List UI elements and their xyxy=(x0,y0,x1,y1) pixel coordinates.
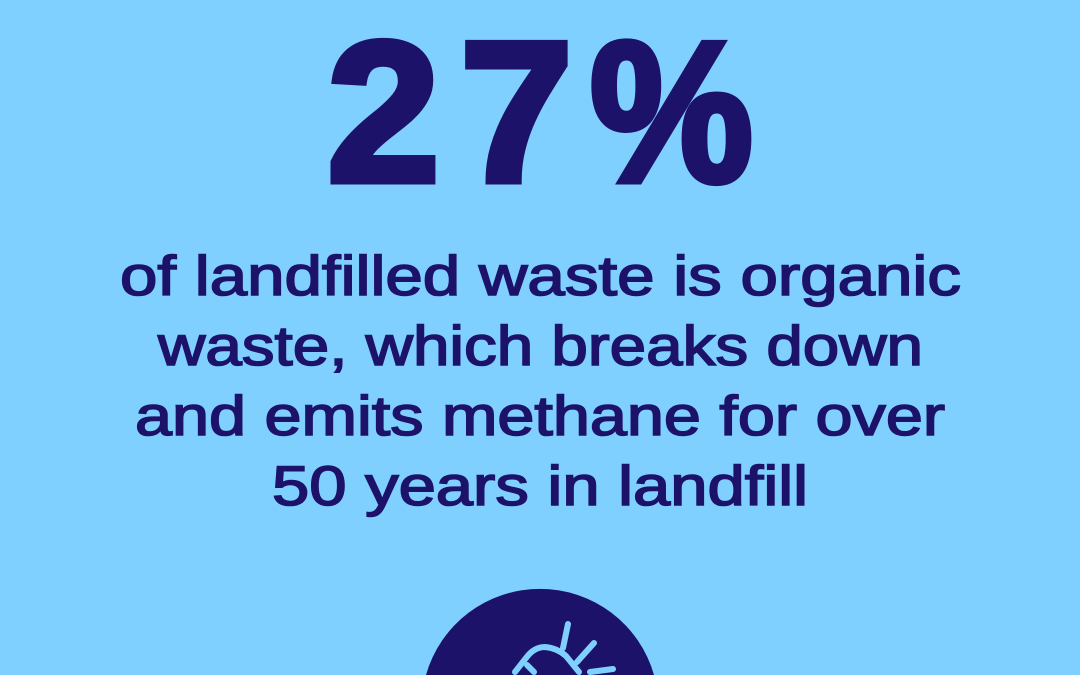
text line 2: waste, which breaks down xyxy=(157,314,923,377)
text line 3: and emits methane for over xyxy=(135,384,945,447)
headline statistic: 27%: 2 xyxy=(327,1,440,224)
body text block xyxy=(120,244,961,517)
text line 4: 50 years in landfill xyxy=(272,454,808,517)
icon: organic waste line drawing xyxy=(515,624,613,672)
headline statistic: 27%: 7 xyxy=(460,1,573,224)
text line 1: of landfilled waste is organic xyxy=(120,244,961,307)
badge circle xyxy=(426,589,654,675)
icon badge: circle with sprouting organic item, cropped by the bottom edge xyxy=(426,589,654,675)
headline statistic: 27% xyxy=(327,1,753,224)
headline statistic: 27%: % xyxy=(590,1,753,224)
